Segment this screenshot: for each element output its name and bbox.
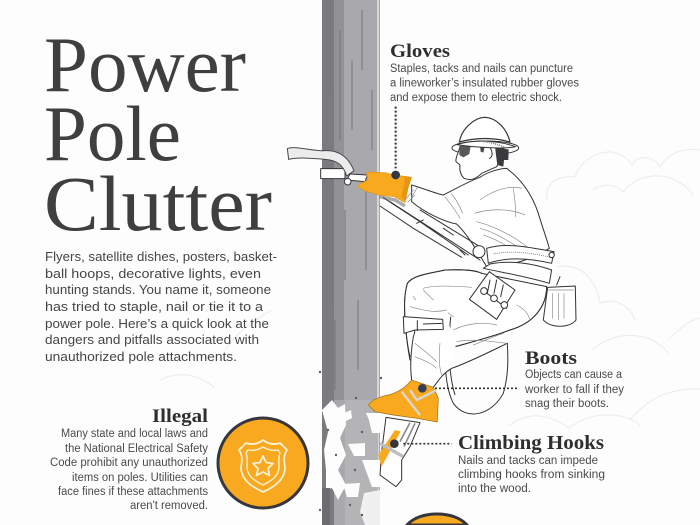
callout: climbing hooks: Climbing Hooks xyxy=(458,433,604,454)
callout: gloves: Gloves xyxy=(390,42,450,62)
callout: illegal: Code prohibit any unauthorized xyxy=(50,457,208,469)
gloves marker xyxy=(391,171,400,179)
intro text: has tried to staple, nail or tie it to a xyxy=(45,299,264,314)
rope loop xyxy=(445,333,508,414)
callout: climbing hooks: into the wood. xyxy=(458,483,531,495)
callout: gloves: Staples, tacks and nails can puncture xyxy=(390,63,573,75)
belt bag xyxy=(543,277,576,326)
icon: police badge xyxy=(218,418,308,508)
callout: illegal: Many state and local laws and xyxy=(61,428,208,440)
knee strap xyxy=(403,317,443,333)
intro text: ball hoops, decorative lights, even xyxy=(45,266,261,281)
intro text: power pole. Here’s a quick look at the xyxy=(45,316,269,331)
icon: next section circle xyxy=(407,514,467,525)
splintered wood at pole base xyxy=(319,371,382,525)
tool pouch xyxy=(469,272,515,319)
climbing hooks marker xyxy=(390,439,399,448)
thigh xyxy=(405,270,547,360)
background clouds xyxy=(160,150,700,428)
callout: climbing hooks: Nails and tacks can impede xyxy=(458,455,598,467)
callout: illegal: the National Electrical Safety xyxy=(65,443,208,455)
work boot xyxy=(368,380,438,422)
callout: boots: snag their boots. xyxy=(525,398,609,410)
callout: illegal: face fines if these attachments xyxy=(58,486,208,498)
intro text: unauthorized pole attachments. xyxy=(45,349,237,364)
intro text: hunting stands. You name it, someone xyxy=(45,282,271,297)
lineworker lower leg xyxy=(368,300,518,487)
title xyxy=(44,21,272,247)
callout: boots: Boots xyxy=(525,349,577,369)
callout: climbing hooks: climbing hooks from sinking xyxy=(458,469,605,481)
title: Clutter xyxy=(44,160,272,247)
callout: illegal: aren't removed. xyxy=(130,500,208,512)
intro text: dangers and pitfalls associated with xyxy=(45,332,259,347)
lineworker legs and tools xyxy=(405,270,576,360)
callout: boots: Objects can cause a xyxy=(525,369,623,381)
head and hard hat xyxy=(452,117,519,180)
callout: illegal xyxy=(50,406,208,512)
callout: gloves: and expose them to electric shock. xyxy=(390,92,562,104)
intro text xyxy=(45,249,277,364)
title: Power xyxy=(44,21,246,108)
intro text: Flyers, satellite dishes, posters, basket- xyxy=(45,249,277,264)
climbing hook xyxy=(378,417,420,487)
pole strap bracket xyxy=(287,148,367,185)
climbing belt and lanyard xyxy=(380,198,554,283)
callout: climbing hooks xyxy=(458,433,605,495)
callout: illegal: items on poles. Utilities can xyxy=(72,472,208,484)
callout: gloves: a lineworker’s insulated rubber gloves xyxy=(390,78,579,90)
insulated glove xyxy=(357,172,412,206)
torso and arm xyxy=(412,168,549,267)
lineworker upper body xyxy=(287,107,554,283)
callout: boots xyxy=(524,349,624,410)
callout: illegal: Illegal xyxy=(152,406,208,427)
gloves leader line xyxy=(393,107,399,168)
boots leader line xyxy=(435,386,518,391)
callout: gloves xyxy=(390,42,579,104)
callout: boots: worker to fall if they xyxy=(524,384,624,396)
title: Pole xyxy=(44,90,181,177)
calf xyxy=(407,300,457,388)
boots marker xyxy=(418,384,427,393)
climbing hooks leader line xyxy=(403,441,452,446)
